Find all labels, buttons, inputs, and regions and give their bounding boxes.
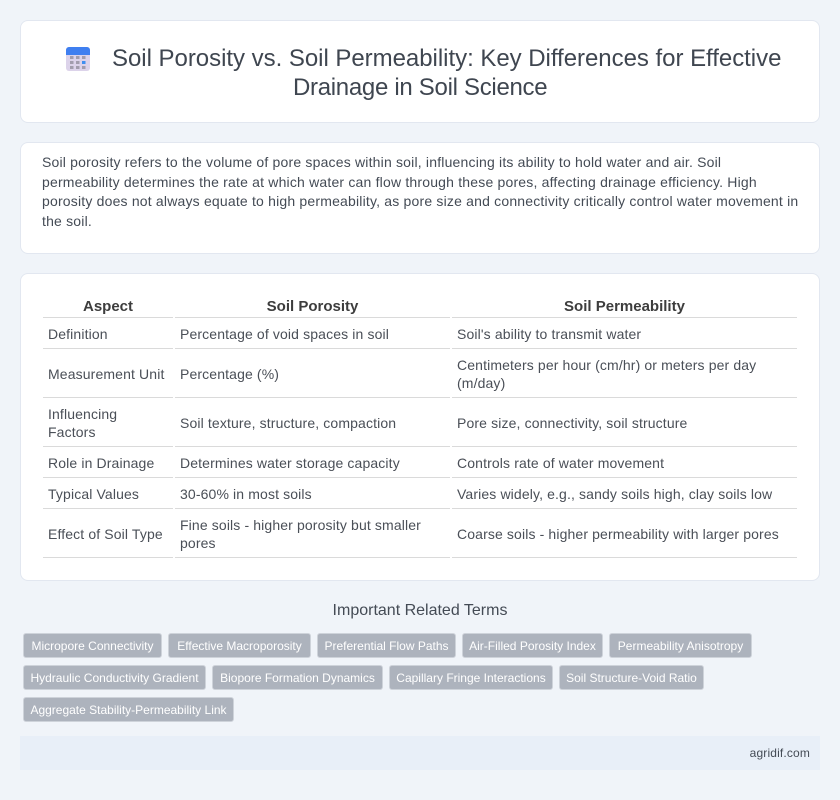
tag [23,665,206,690]
tag: Capillary Fringe Interactions [396,671,546,685]
row label: measurement unit: Measurement Unit [48,366,164,382]
panel: comparison table [20,273,820,581]
tag: Air-Filled Porosity Index [469,639,596,653]
permeability unit: (m/day) [457,375,505,391]
text block: introduction [42,154,798,229]
row label: typical values: Typical Values [48,486,139,502]
text block: introduction: the soil. [42,213,92,229]
row label: influencing factors [48,406,117,440]
heading: important related terms: Important Related Terms [333,602,507,619]
row label: influencing factors: Factors [48,424,96,440]
footer bar [20,736,820,770]
tag [317,633,456,658]
tag: Effective Macroporosity [177,639,302,653]
permeability unit: Centimeters per hour (cm/hr) or meters per day [457,357,756,373]
panel: introduction [20,142,820,254]
porosity role: Determines water storage capacity [180,455,400,471]
tag [462,633,603,658]
icon: calendar grid [66,47,90,71]
tag [559,665,704,690]
title: Drainage in Soil Science [293,74,547,101]
permeability values: Varies widely, e.g., sandy soils high, clay soils low [457,486,772,502]
title [112,45,781,101]
row label: influencing factors: Influencing [48,406,117,422]
permeability unit [457,357,756,391]
table heading: soil permeability: Soil Permeability [564,298,685,315]
panel: title header [20,20,820,123]
tag: Hydraulic Conductivity Gradient [30,671,199,685]
permeability definition: Soil's ability to transmit water [457,326,641,342]
porosity soil type effect [180,517,421,551]
tag [23,697,234,722]
tag: Micropore Connectivity [31,639,154,653]
tag [23,633,162,658]
porosity soil type effect: Fine soils - higher porosity but smaller [180,517,421,533]
footer source text: agridif.com [750,746,810,760]
porosity soil type effect: pores [180,535,216,551]
tag: Preferential Flow Paths [324,639,449,653]
porosity unit: Percentage (%) [180,366,279,382]
table heading: soil porosity: Soil Porosity [267,298,358,315]
tag [168,633,311,658]
row label: role in drainage: Role in Drainage [48,455,154,471]
row label: effect of soil type: Effect of Soil Type [48,526,163,542]
table heading: aspect: Aspect [83,298,133,315]
porosity factors: Soil texture, structure, compaction [180,415,396,431]
porosity values: 30-60% in most soils [180,486,312,502]
tag list [23,633,752,722]
permeability role: Controls rate of water movement [457,455,664,471]
text block: introduction: porosity does not always equate to high permeability, as pore size and connectivity critically control water movement in [42,193,798,209]
text block: introduction: permeability determines the rate at which water can flow through these pores, affecting drainage efficiency. High [42,174,757,190]
tag: Permeability Anisotropy [618,639,743,653]
row label: definition: Definition [48,326,108,342]
tag: Biopore Formation Dynamics [220,671,375,685]
tag: Aggregate Stability-Permeability Link [30,703,227,717]
tag [212,665,383,690]
tag [609,633,752,658]
text block: introduction: Soil porosity refers to the volume of pore spaces within soil, influencing its ability to hold water and air. Soil [42,154,721,170]
porosity definition: Percentage of void spaces in soil [180,326,389,342]
tag: Soil Structure-Void Ratio [566,671,697,685]
permeability factors: Pore size, connectivity, soil structure [457,415,687,431]
tag [389,665,553,690]
permeability soil type effect: Coarse soils - higher permeability with larger pores [457,526,779,542]
title: Soil Porosity vs. Soil Permeability: Key Differences for Effective [112,45,781,72]
